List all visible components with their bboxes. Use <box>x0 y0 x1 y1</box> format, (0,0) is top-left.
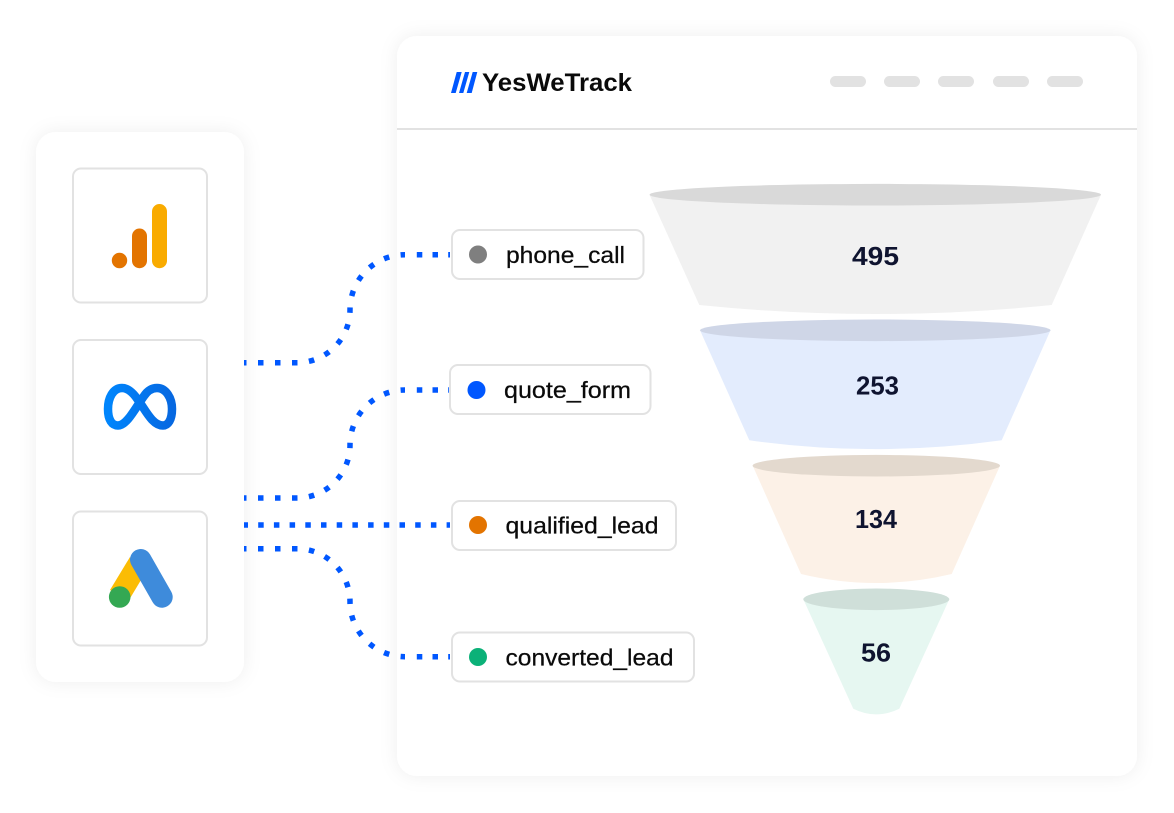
header menu placeholders <box>830 76 1083 87</box>
funnel stage: quote_form 253 <box>700 320 1051 449</box>
funnel stage: phone_call 495 <box>650 184 1101 314</box>
label: qualified_lead: qualified_lead <box>506 512 658 538</box>
connector: Google Ads to quote_form <box>244 390 449 498</box>
funnel stage: converted_lead 56: 56 <box>861 638 891 668</box>
label: converted_lead <box>452 632 694 682</box>
funnel chart <box>650 184 1101 714</box>
icon: Meta <box>73 340 207 474</box>
funnel stage: phone_call 495: 495 <box>852 241 899 271</box>
funnel stage: qualified_lead 134 <box>753 455 1000 583</box>
connector: Google Ads to converted_lead <box>244 549 450 657</box>
icon: Google Analytics <box>73 168 207 302</box>
header divider <box>397 128 1137 130</box>
funnel stage: converted_lead 56 <box>803 588 949 714</box>
label: qualified_lead <box>452 501 676 550</box>
logo: YesWeTrack: YesWeTrack <box>482 69 632 97</box>
icon: Google Ads <box>73 512 207 646</box>
funnel stage: qualified_lead 134: 134 <box>855 504 898 534</box>
label: phone_call: phone_call <box>506 242 625 268</box>
connector: Google Ads to qualified_lead <box>244 522 450 528</box>
panel: YesWeTrack dashboard <box>397 36 1137 776</box>
label: converted_lead: converted_lead <box>506 644 674 670</box>
panel: integration sources <box>36 132 244 682</box>
label: quote_form <box>450 365 650 414</box>
funnel stage: quote_form 253: 253 <box>856 371 899 401</box>
connector: Meta to phone_call <box>244 255 450 363</box>
label: quote_form: quote_form <box>504 377 631 403</box>
label: phone_call <box>452 230 644 279</box>
